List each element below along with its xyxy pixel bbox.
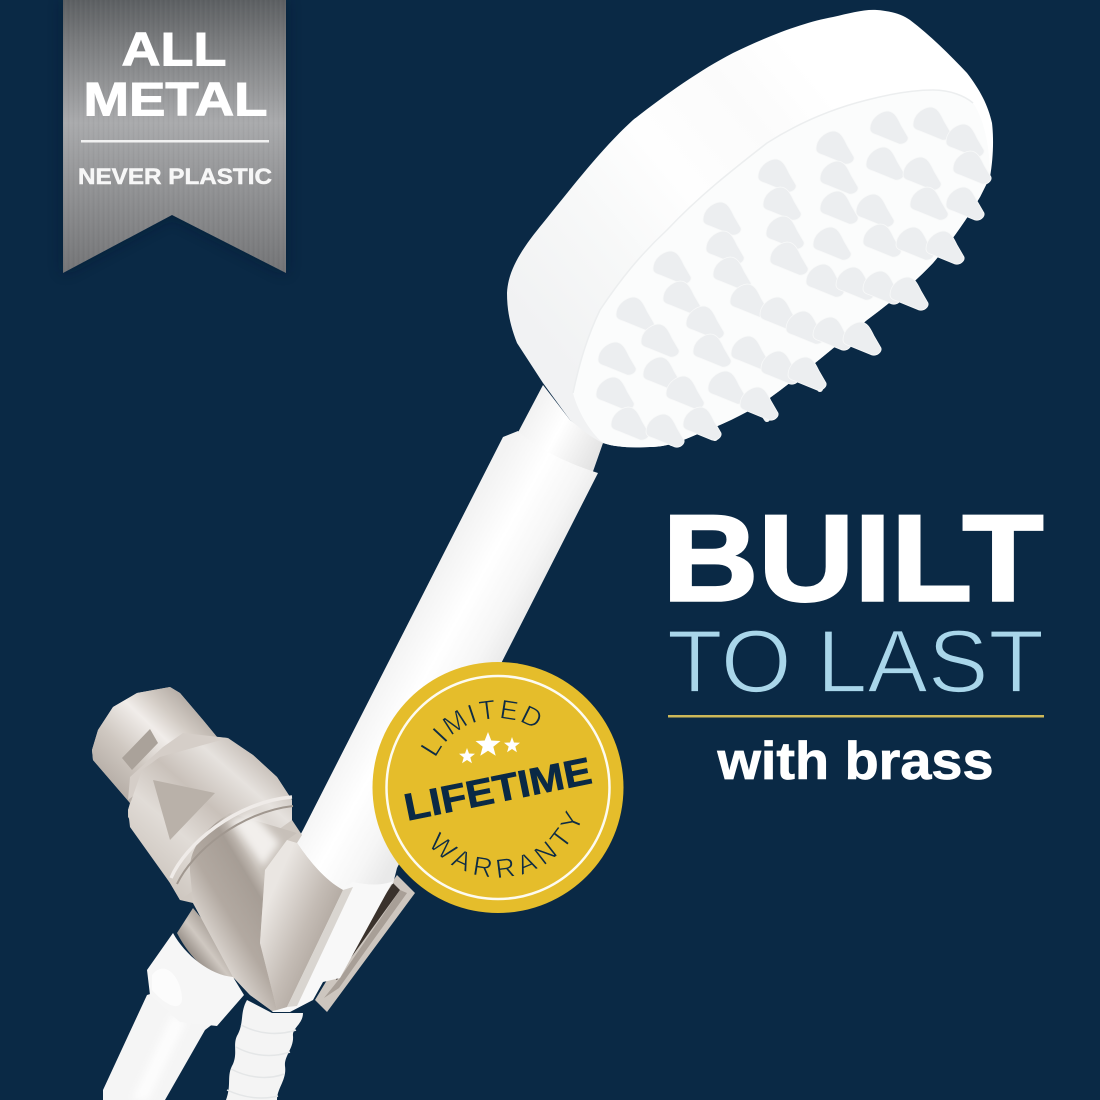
shower head (507, 10, 993, 447)
hex flat (122, 729, 158, 770)
banner heading: all metal: METAL (84, 72, 268, 126)
headline: to last: TO LAST (667, 611, 1044, 711)
badge stars (459, 732, 520, 763)
metal clip behind bracket (315, 875, 415, 1012)
plate edge (287, 887, 353, 1007)
metal ball joint (177, 908, 240, 980)
shower hose and connector (103, 908, 303, 1100)
highlight on lower body (230, 813, 280, 867)
top cap (92, 687, 217, 803)
banner heading: all metal (84, 22, 268, 126)
lower body right plate (260, 840, 343, 1010)
white clip plate of handle (272, 881, 393, 1012)
handle of shower head (292, 385, 603, 895)
headline: built: BUILT (662, 490, 1044, 628)
triangular facet (153, 780, 215, 840)
badge disc (372, 662, 624, 913)
subheading: with brass: with brass (716, 732, 994, 791)
badge ring (386, 676, 610, 899)
warranty badge (372, 662, 624, 913)
brushed metal bracket (92, 687, 353, 1011)
flexible hose (226, 1000, 303, 1100)
hex nut (147, 933, 244, 1026)
dark gap in clip (332, 883, 400, 980)
head outer shell (507, 10, 993, 447)
middle collar (128, 738, 292, 900)
face rim line (573, 90, 973, 393)
spray nozzles (596, 107, 991, 447)
hex nut band (128, 733, 228, 800)
lower body left (190, 813, 297, 1011)
bracket silhouette (92, 687, 343, 1011)
banner heading: all metal: ALL (122, 22, 226, 76)
head face (573, 90, 990, 447)
neck (514, 385, 603, 480)
banner subheading: never plastic: NEVER PLASTIC (78, 164, 272, 189)
protruding nozzle tips (663, 166, 985, 443)
badge text: warranty: WARRANTY (432, 810, 580, 878)
connector hose (103, 985, 218, 1100)
badge text: limited: LIMITED (420, 700, 540, 756)
collar ring (171, 797, 292, 878)
ribbon banner: all metal, never plastic (63, 0, 286, 273)
badge text: lifetime: LIFETIME (401, 750, 595, 830)
